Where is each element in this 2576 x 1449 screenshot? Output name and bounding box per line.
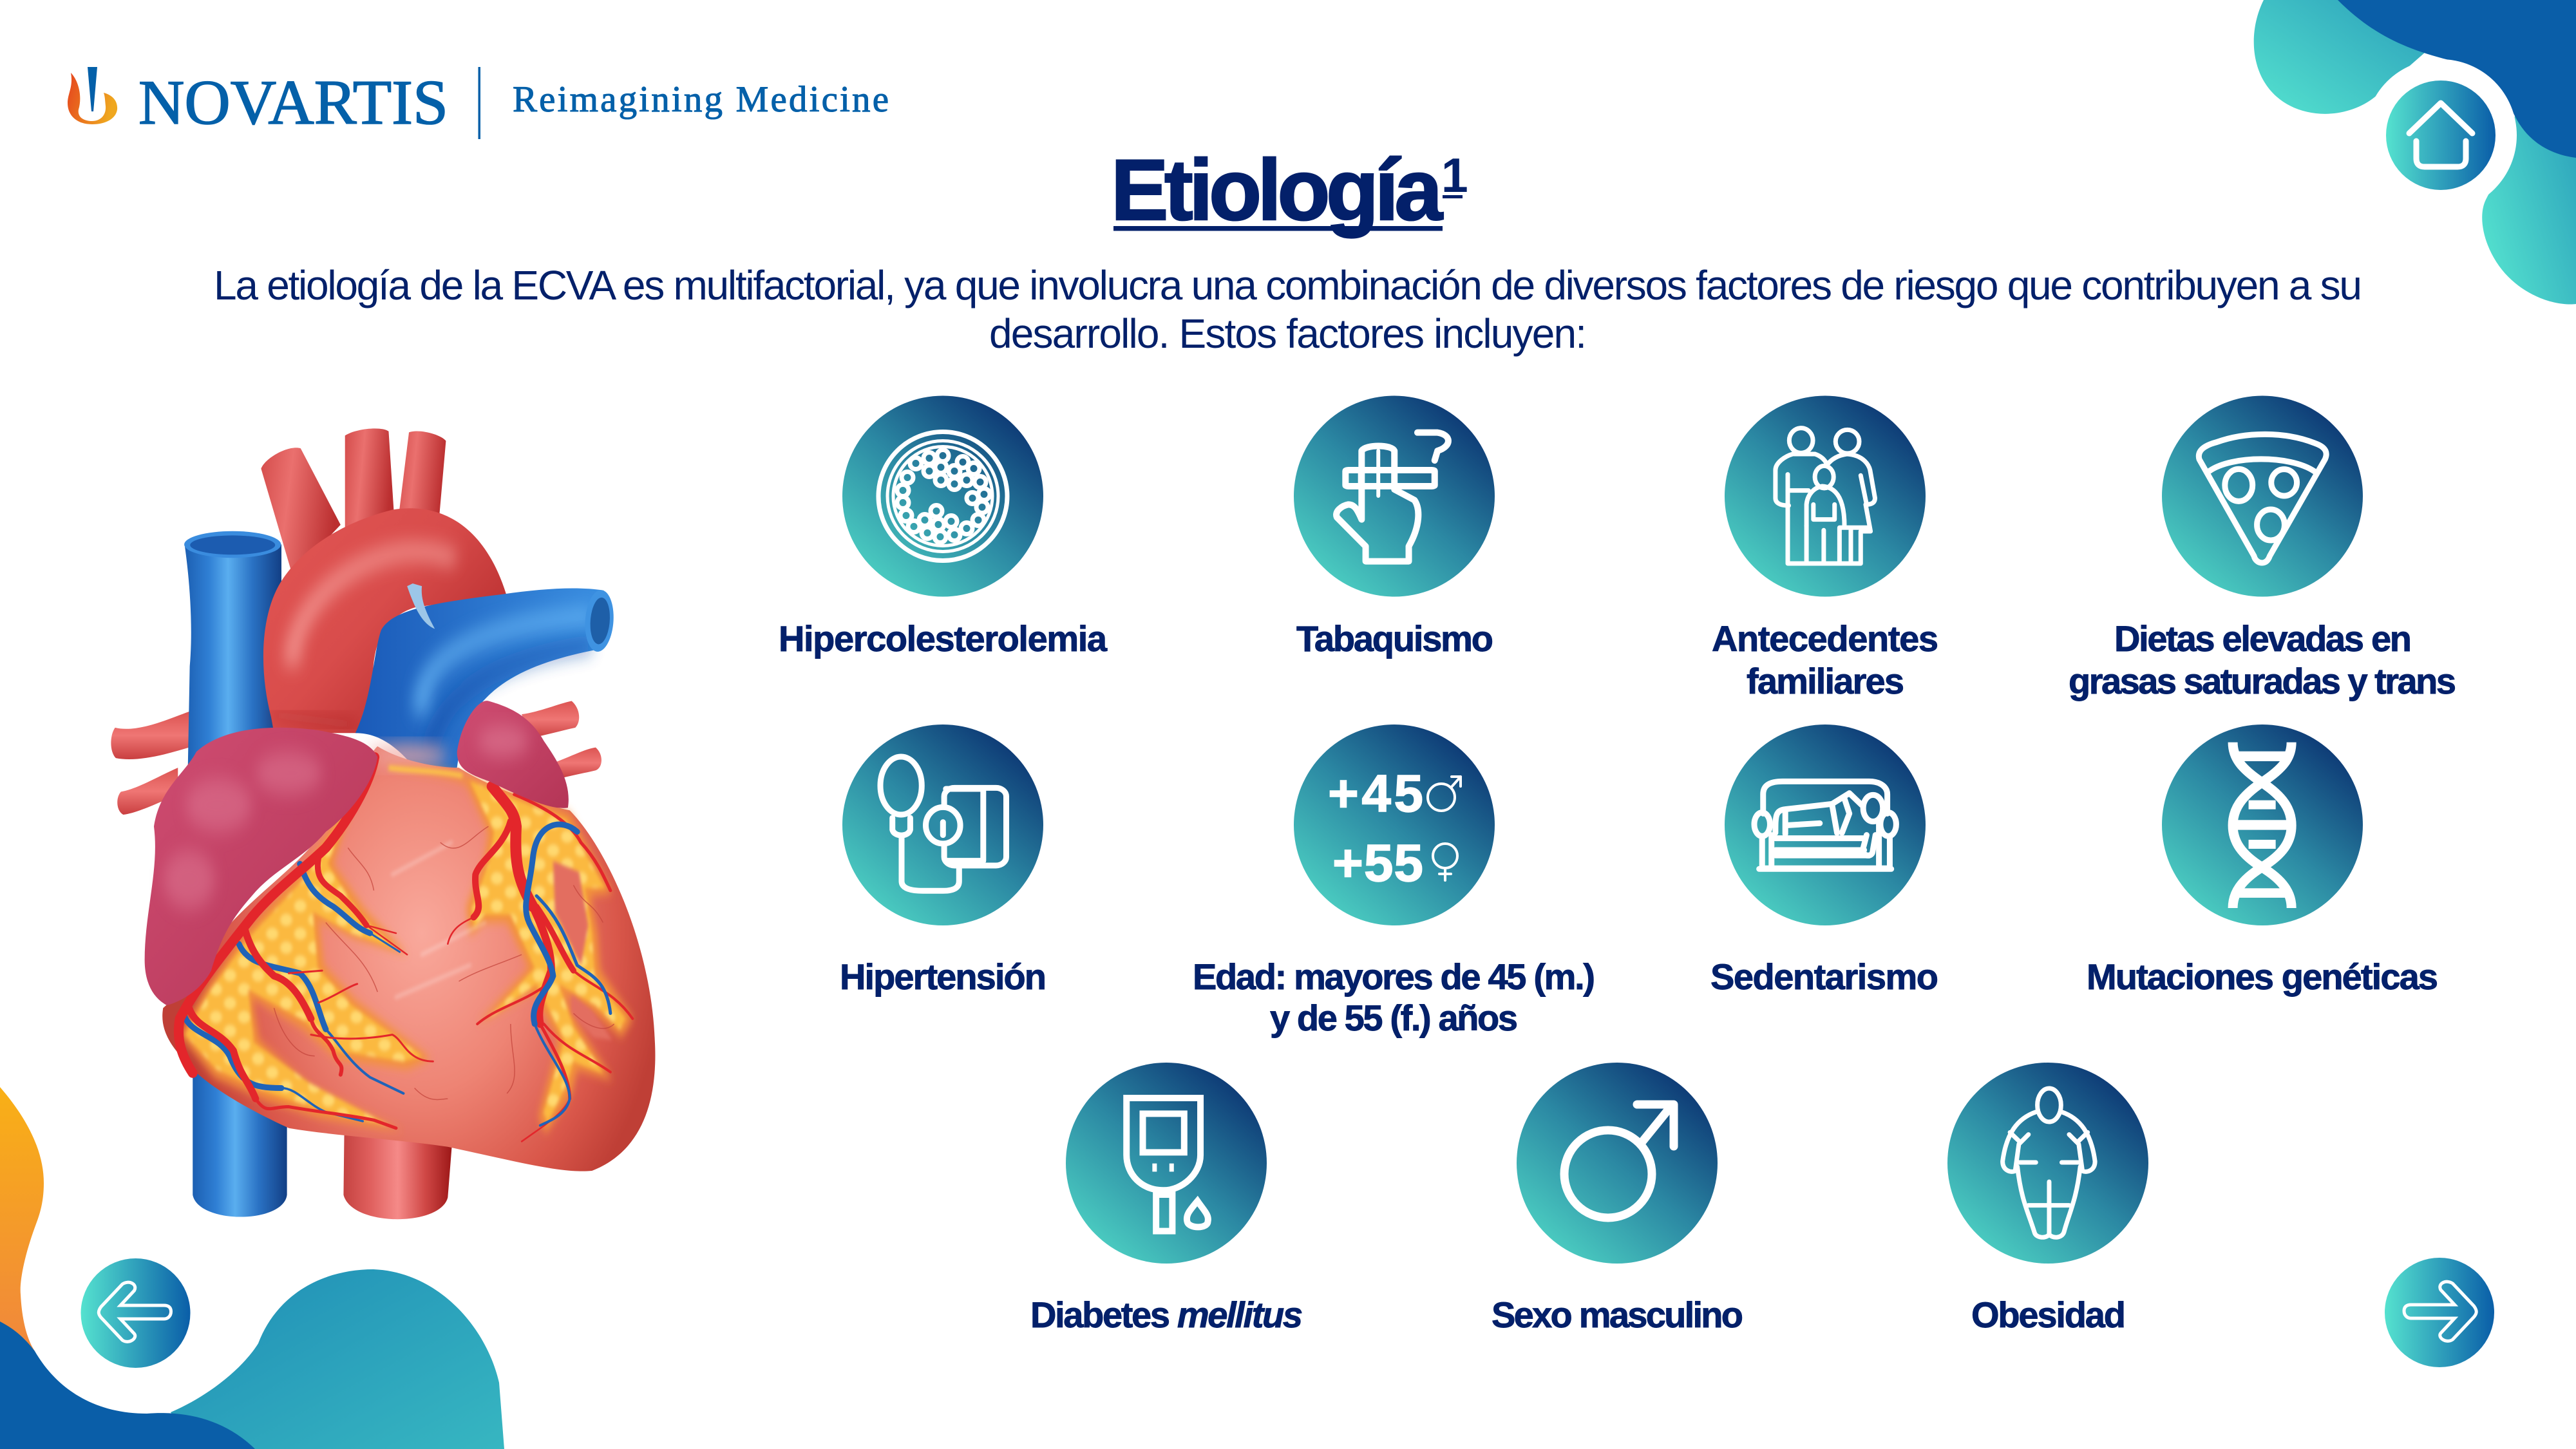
aortic arch: [263, 508, 506, 733]
icon: Novartis flame: [68, 67, 117, 124]
inferior vena cava: [193, 1061, 287, 1217]
icon: pizza slice: [2162, 395, 2363, 596]
factor: Antecedentes familiares: familiares: [1747, 661, 1904, 701]
myocardium islands within fat: [553, 861, 612, 1040]
previous button: [81, 1258, 191, 1368]
decorative blobs: bottom left corner: [0, 1087, 504, 1449]
factor: Mutaciones genéticas: [2087, 724, 2438, 997]
icon: age and sex badges: +45: [1328, 764, 1423, 823]
icon: family: [1725, 395, 1926, 596]
next button: [2385, 1258, 2494, 1367]
factor: Mutaciones genéticas: Mutaciones genéticas: [2087, 956, 2438, 997]
coronary vessels: right side: [448, 786, 632, 1141]
intro text: desarrollo. Estos factores incluyen:: [989, 310, 1587, 357]
logo: Novartis Reimagining Medicine: NOVARTIS: [138, 68, 448, 138]
pulmonary veins right: [522, 701, 601, 779]
factor: Hipertensión: Hipertensión: [840, 956, 1046, 997]
intro text: [214, 262, 2362, 357]
factor: Antecedentes familiares: Antecedentes: [1712, 618, 1938, 659]
title: 1: [1441, 148, 1468, 202]
decorative blobs: top right corner: [2254, 0, 2576, 305]
factor: Sedentarismo: [1710, 724, 1938, 997]
factor: Antecedentes familiares: [1712, 395, 1938, 701]
factor: Tabaquismo: [1294, 395, 1495, 659]
icon: male symbol: [1517, 1063, 1718, 1264]
pulmonary veins left: [111, 712, 193, 815]
aortic branches: [261, 428, 446, 576]
factor: Dietas elevadas en grasas saturadas y trans: Dietas elevadas en: [2114, 618, 2412, 659]
factor: Obesidad: Obesidad: [1971, 1294, 2126, 1335]
factor: Hipercolesterolemia: Hipercolesterolemia: [779, 618, 1108, 659]
factor: Tabaquismo: Tabaquismo: [1296, 618, 1493, 659]
intro text: La etiología de la ECVA es multifactorial, ya que involucra una combinación de diversos factores de riesgo que contribuyen a su: [214, 262, 2362, 308]
factor: Edad: [1193, 724, 1595, 1038]
icon: age and sex badges: +55: [1332, 834, 1423, 893]
icon: person on sofa: [1725, 724, 1926, 925]
right atrium: [145, 728, 377, 1005]
factor: Edad: y de 55 (f.) años: [1270, 998, 1518, 1038]
title: Etiología: [1111, 142, 1443, 238]
factor: Hipertensión: [840, 724, 1046, 997]
factor: Sexo masculino: [1492, 1063, 1743, 1335]
factor: Diabetes mellitus: Diabetes mellitus: [1030, 1294, 1303, 1335]
epicardial fat: [180, 758, 632, 1133]
icon: glucometer: [1066, 1063, 1267, 1264]
muscle highlights: [392, 842, 485, 998]
home button: [2386, 80, 2496, 190]
icon: artery with cholesterol: [842, 395, 1043, 596]
factor: Dietas elevadas en grasas saturadas y trans: grasas saturadas y trans: [2069, 661, 2456, 701]
icon: blood pressure cuff: [842, 724, 1043, 925]
junction fade: [366, 745, 448, 766]
ventricles: [162, 746, 655, 1171]
descending aorta: [343, 1131, 452, 1219]
icon: age and sex badges: [1294, 724, 1495, 925]
factor: Hipercolesterolemia: [779, 395, 1108, 659]
heart illustration: [111, 428, 655, 1219]
icon: hand with cigarette: [1294, 395, 1495, 596]
pulmonary trunk: [355, 583, 616, 768]
logo: Novartis Reimagining Medicine: [68, 67, 889, 139]
factor: Sexo masculino: Sexo masculino: [1492, 1294, 1743, 1335]
capillaries: [274, 826, 614, 1099]
logo: Novartis Reimagining Medicine: Reimagining Medicine: [513, 79, 889, 120]
left atrial appendage: [457, 701, 569, 808]
factor: Dietas elevadas en grasas saturadas y trans: [2069, 395, 2456, 701]
icon: DNA helix: [2162, 724, 2363, 925]
coronary vessels: left side: [178, 757, 433, 1128]
factor: Edad: Edad: mayores de 45 (m.): [1193, 956, 1595, 997]
superior vena cava: [184, 531, 281, 805]
factor: Obesidad: [1947, 1063, 2148, 1335]
factor: Diabetes mellitus: [1030, 1063, 1303, 1335]
icon: obese person: [1947, 1063, 2148, 1264]
factor: Sedentarismo: Sedentarismo: [1710, 956, 1938, 997]
